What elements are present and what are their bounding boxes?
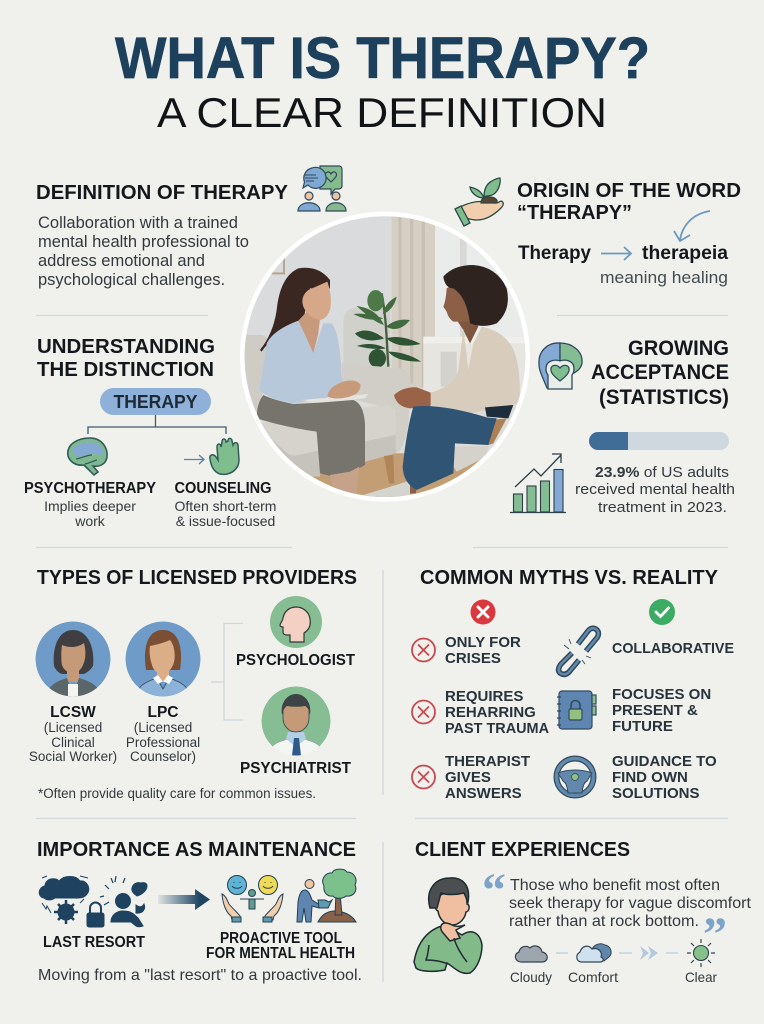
myth: requires reharring past trauma: REHARRING: [445, 704, 536, 721]
divider: [36, 314, 728, 316]
heading: growing acceptance: (STATISTICS): [599, 385, 729, 409]
client quote: Those who benefit most often: [510, 877, 720, 894]
myth: requires reharring past trauma: REQUIRES: [445, 688, 523, 705]
reality: guidance to find own solutions: [612, 753, 717, 802]
icon: gardener watering a tree: [297, 869, 356, 922]
bracket connector: [211, 624, 243, 720]
title: WHAT IS THERAPY?: [115, 26, 650, 91]
panel: definition of therapy: DEFINITION OF THERAPY: [36, 182, 289, 204]
myth: only for crises: [412, 634, 521, 667]
heading: understanding the distinction: THE DISTINCTION: [37, 358, 214, 381]
myth: therapist gives answers: [412, 753, 530, 802]
provider: psychologist: [236, 596, 356, 669]
open quote mark: “: [482, 864, 506, 917]
arrow: last resort to proactive: [158, 889, 210, 910]
myth: only for crises: CRISES: [445, 650, 501, 667]
panel: psychotherapy: PSYCHOTHERAPY: [24, 480, 157, 497]
icon: arrow and hand: [184, 438, 239, 474]
provider labels: LPC: (Licensed: [134, 720, 192, 735]
myth: therapist gives answers: THERAPIST: [445, 753, 530, 770]
icon: plant in a hand: [455, 178, 503, 226]
panel: definition of therapy: Collaboration with a trained: [38, 214, 238, 232]
etymology: therapy to therapeia: therapeia: [642, 243, 728, 264]
reality: collaborative: COLLABORATIVE: [612, 640, 734, 657]
icon: chain link: [559, 628, 598, 674]
icon: thoughtful person: [414, 878, 482, 973]
journey: cloudy to clear: [510, 939, 717, 985]
icon: steering wheel: [556, 758, 594, 796]
progress bar: 23.9 percent: [589, 432, 729, 450]
provider labels: LCSW: Clinical: [51, 735, 95, 750]
panel: definition of therapy: mental health professional to: [38, 233, 249, 251]
provider: psychologist: PSYCHOLOGIST: [236, 652, 356, 669]
icon: hands holding smiling faces: [222, 876, 283, 922]
provider labels: LPC: Counselor): [130, 749, 196, 764]
label: last resort: LAST RESORT: [43, 934, 145, 951]
panel: counseling: [174, 480, 276, 529]
title: A CLEAR DEFINITION: [157, 89, 607, 136]
close quote mark: ”: [703, 908, 727, 961]
avatar: LCSW: [36, 622, 110, 698]
panel: definition of therapy: psychological challenges.: [38, 271, 225, 289]
statistic text: 23.9% of US adults: [595, 464, 729, 481]
panel: origin of the word: ORIGIN OF THE WORD: [517, 179, 741, 202]
provider labels: LCSW: [29, 704, 117, 764]
myth: therapist gives answers: ANSWERS: [445, 785, 522, 802]
reality: focuses on present and future: FOCUSES ON: [612, 686, 711, 703]
statistic text: [575, 464, 735, 516]
label: proactive tool: PROACTIVE TOOL: [220, 930, 342, 947]
journey: cloudy to clear: Cloudy: [510, 969, 552, 985]
panel: psychotherapy: [24, 480, 157, 529]
reality: focuses on present and future: FUTURE: [612, 718, 673, 735]
icon: head with heart: [539, 343, 582, 389]
heading: types of licensed providers: TYPES OF LICENSED PROVIDERS: [37, 567, 357, 589]
client quote: [509, 877, 752, 930]
icon: reality check badge: [649, 599, 675, 625]
footnote: *Often provide quality care for common issues.: [38, 786, 316, 801]
panel: definition of therapy: [36, 182, 289, 289]
provider: psychiatrist: [240, 686, 352, 777]
heading: importance as maintenance: IMPORTANCE AS MAINTENANCE: [37, 839, 356, 861]
client quote: seek therapy for vague discomfort: [509, 895, 752, 912]
panel: psychotherapy: work: [74, 513, 106, 529]
provider labels: LPC: Professional: [126, 735, 200, 750]
icon: last resort cluster: [39, 876, 147, 927]
title: [115, 26, 650, 136]
myth: requires reharring past trauma: [412, 688, 549, 737]
arrow: curved into therapeia: [674, 211, 710, 241]
panel: counseling: COUNSELING: [174, 480, 272, 497]
provider: psychiatrist: PSYCHIATRIST: [240, 760, 352, 777]
photo: therapist and client in a living room: [240, 210, 530, 505]
reality: focuses on present and future: PRESENT &: [612, 702, 698, 719]
provider labels: LCSW: (Licensed: [44, 720, 102, 735]
icon: myth cross badge: [470, 600, 496, 624]
panel: origin of the word: “THERAPY”: [517, 201, 632, 224]
etymology: therapy to therapeia: [518, 243, 728, 287]
reality: guidance to find own solutions: SOLUTIONS: [612, 785, 700, 802]
reality: guidance to find own solutions: FIND OWN: [612, 769, 688, 786]
caption: moving to proactive: Moving from a "last resort" to a proactive tool.: [38, 967, 362, 984]
panel: counseling: Often short-term: [175, 498, 276, 514]
panel: counseling: & issue-focused: [176, 513, 275, 529]
myth: requires reharring past trauma: PAST TRAUMA: [445, 720, 549, 737]
provider labels: LPC: LPC: [148, 704, 178, 721]
provider labels: LPC: [126, 704, 200, 764]
icon: growth chart: [510, 454, 566, 512]
journey: cloudy to clear: Comfort: [568, 969, 618, 985]
label: proactive tool: FOR MENTAL HEALTH: [206, 945, 355, 962]
heading: common myths vs. reality: COMMON MYTHS VS. REALITY: [420, 567, 719, 589]
diagram: therapy branches: [88, 388, 226, 434]
heading: understanding the distinction: [37, 335, 215, 381]
reality: focuses on present and future: [612, 686, 711, 735]
statistic text: received mental health: [575, 481, 735, 498]
panel: definition of therapy: address emotional and: [38, 252, 205, 270]
statistic text: treatment in 2023.: [598, 499, 727, 516]
client quote: rather than at rock bottom.: [509, 913, 699, 930]
heading: growing acceptance: ACCEPTANCE: [591, 360, 729, 384]
heading: growing acceptance: GROWING: [628, 336, 729, 360]
heading: client experiences: CLIENT EXPERIENCES: [415, 839, 630, 861]
myth: therapist gives answers: GIVES: [445, 769, 491, 786]
diagram: therapy branches: THERAPY: [114, 392, 198, 412]
icon: two people talking: [298, 166, 346, 211]
heading: understanding the distinction: UNDERSTANDING: [37, 335, 215, 358]
provider labels: LCSW: Social Worker): [29, 749, 117, 764]
icon: locked notebook: [557, 691, 596, 729]
icon: brain: [68, 438, 107, 475]
journey: cloudy to clear: Clear: [685, 969, 717, 985]
provider labels: LCSW: LCSW: [50, 704, 96, 721]
heading: growing acceptance: [591, 336, 729, 409]
reality: guidance to find own solutions: GUIDANCE TO: [612, 753, 717, 770]
panel: origin of the word: [517, 179, 741, 224]
panel: psychotherapy: Implies deeper: [44, 498, 136, 514]
etymology: therapy to therapeia: Therapy: [518, 243, 591, 264]
myth: only for crises: ONLY FOR: [445, 634, 521, 651]
avatar: LPC: [126, 622, 200, 698]
label: proactive tool: [206, 930, 355, 962]
etymology: therapy to therapeia: meaning healing: [600, 268, 728, 287]
divider: [36, 548, 728, 982]
